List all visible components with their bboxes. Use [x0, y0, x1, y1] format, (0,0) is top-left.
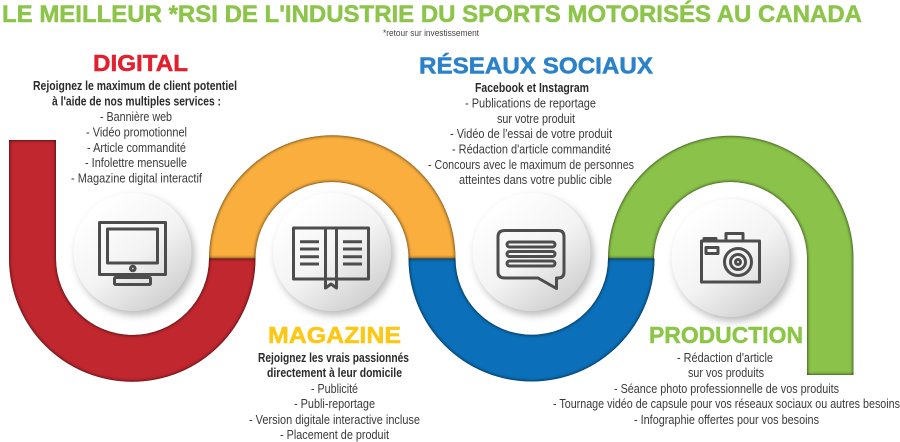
- panel: réseaux sociaux: [419, 52, 654, 187]
- icon: open book: [294, 228, 368, 288]
- text block: magazine: directement à leur domicile: [267, 365, 402, 380]
- text block: magazine: Rejoignez les vrais passionnés: [258, 350, 409, 365]
- text block: magazine: [249, 350, 420, 442]
- text block: magazine: - Publicité: [311, 381, 358, 396]
- panel: digital: [33, 50, 237, 186]
- text block: digital: - Bannière web: [100, 109, 172, 124]
- text block: magazine: - Publi-reportage: [294, 396, 375, 411]
- panel: magazine: [249, 322, 420, 442]
- text block: production: sur vos produits: [688, 365, 764, 380]
- text block: réseaux sociaux: Facebook et Instagram: [475, 80, 589, 95]
- ribbon: blue U: [408, 258, 654, 381]
- heading: réseaux sociaux: RÉSEAUX SOCIAUX: [419, 52, 654, 78]
- text block: réseaux sociaux: - Concours avec le maximum de personnes: [428, 157, 634, 172]
- text block: magazine: - Version digitale interactive incluse: [249, 412, 420, 427]
- text block: réseaux sociaux: [428, 80, 634, 187]
- text block: digital: - Magazine digital interactif: [71, 170, 202, 186]
- text block: digital: - Infolettre mensuelle: [85, 155, 187, 170]
- text block: production: - Séance photo professionnelle de vos produits: [614, 381, 839, 396]
- text block: production: - Infographie offertes pour vos besoins: [634, 412, 819, 427]
- text block: réseaux sociaux: sur votre produit: [497, 111, 575, 126]
- icon: camera: [702, 234, 760, 282]
- text block: production: - Rédaction d'article: [677, 350, 773, 365]
- footnote: *retour sur investissement: [383, 28, 479, 38]
- text block: digital: - Vidéo promotionnel: [86, 124, 187, 140]
- heading: production: PRODUCTION: [649, 322, 803, 348]
- ribbon: orange arch: [209, 135, 456, 258]
- text block: digital: Rejoignez le maximum de client potentiel: [33, 78, 237, 93]
- heading: magazine: MAGAZINE: [268, 322, 401, 348]
- text block: digital: à l'aide de nos multiples services :: [52, 94, 221, 108]
- ribbon: red U: [9, 140, 256, 382]
- panel: production: [553, 322, 900, 427]
- text block: réseaux sociaux: - Rédaction d'article commandité: [452, 142, 611, 156]
- title: LE MEILLEUR *RSI DE L'INDUSTRIE DU SPORTS MOTORISÉS AU CANADA: [2, 0, 862, 28]
- text block: production: [553, 350, 900, 427]
- circle: production: [672, 199, 790, 317]
- circle: digital: [74, 193, 192, 311]
- icon: monitor: [100, 222, 166, 284]
- text block: magazine: - Placement de produit: [280, 427, 389, 442]
- circle: magazine: [273, 193, 391, 311]
- ribbon: green arch: [608, 136, 854, 375]
- circle: social: [472, 193, 590, 311]
- heading: digital: DIGITAL: [93, 50, 188, 76]
- text block: digital: - Article commandité: [87, 140, 186, 155]
- text block: réseaux sociaux: - Publications de reportage: [465, 96, 596, 110]
- text block: digital: [33, 78, 237, 186]
- text block: réseaux sociaux: atteintes dans votre public cible: [459, 172, 612, 187]
- text block: réseaux sociaux: - Vidéo de l'essai de votre produit: [450, 126, 612, 141]
- icon: speech bubble: [498, 230, 564, 288]
